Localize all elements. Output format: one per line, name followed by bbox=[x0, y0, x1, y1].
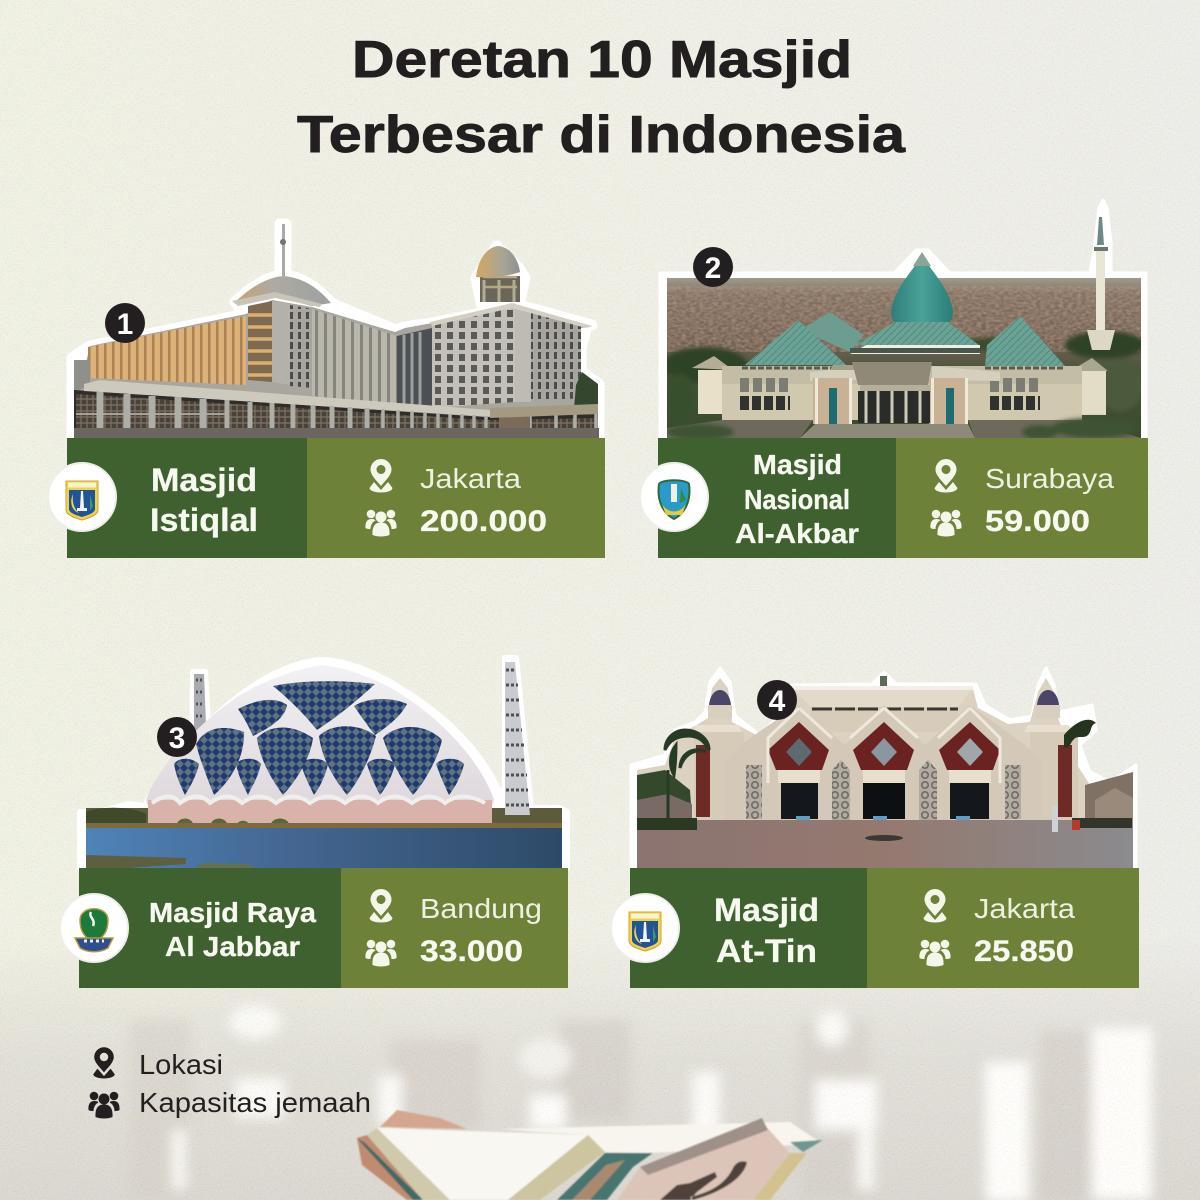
name band bbox=[630, 868, 867, 988]
name text bbox=[735, 449, 859, 549]
panel: Masjid Nasional Al-Akbar bbox=[640, 200, 1148, 558]
name band bbox=[67, 438, 307, 558]
photo: Masjid At-Tin bbox=[631, 668, 1136, 868]
badge: 1: 1 bbox=[117, 308, 133, 341]
name text: Nasional bbox=[744, 484, 850, 515]
emblem: Jakarta bbox=[48, 463, 116, 531]
icon: location bbox=[370, 459, 392, 492]
emblem: East Java bbox=[640, 463, 708, 531]
name text: Masjid bbox=[151, 462, 257, 498]
photo: Masjid Raya Al Jabbar bbox=[80, 658, 567, 868]
name text: Al Jabbar bbox=[165, 931, 300, 962]
name text: Masjid Raya bbox=[149, 897, 316, 928]
info band bbox=[341, 868, 568, 988]
name text bbox=[149, 897, 316, 962]
icon: capacity bbox=[365, 940, 397, 966]
name text: Al-Akbar bbox=[735, 518, 859, 549]
title: Terbesar di Indonesia bbox=[297, 106, 906, 164]
icon: location bbox=[934, 459, 958, 492]
location text: Surabaya bbox=[985, 463, 1114, 494]
icon: location bbox=[370, 889, 392, 922]
capacity number: 33.000 bbox=[420, 935, 523, 968]
icon: capacity legend bbox=[88, 1092, 120, 1118]
location text: Jakarta bbox=[974, 893, 1075, 924]
emblem: Jakarta bbox=[611, 894, 679, 962]
badge: 3: 3 bbox=[169, 722, 185, 755]
legend text: capacity: Kapasitas jemaah bbox=[139, 1087, 371, 1118]
book illustration bbox=[357, 1110, 823, 1200]
legend bbox=[88, 1047, 371, 1118]
photo: Masjid Nasional Al-Akbar bbox=[660, 200, 1146, 440]
icon: capacity bbox=[365, 510, 397, 536]
location text: Bandung bbox=[420, 893, 542, 924]
capacity number: 25.850 bbox=[974, 935, 1074, 968]
name text: Istiqlal bbox=[150, 502, 258, 538]
title: Deretan 10 Masjid bbox=[352, 31, 852, 89]
badge: 1 bbox=[105, 303, 145, 343]
name text bbox=[150, 462, 258, 538]
info band bbox=[896, 438, 1148, 558]
capacity number: 200.000 bbox=[420, 505, 547, 538]
name text: Masjid bbox=[753, 449, 842, 480]
name text: At-Tin bbox=[716, 933, 817, 969]
photo: Masjid Istiqlal bbox=[72, 224, 599, 439]
badge: 4 bbox=[757, 680, 797, 720]
name text: Masjid bbox=[714, 892, 819, 928]
panel: Masjid Istiqlal bbox=[48, 224, 605, 558]
name band bbox=[658, 438, 896, 558]
emblem: West Java bbox=[60, 894, 128, 962]
location text: Jakarta bbox=[420, 463, 521, 494]
title bbox=[297, 31, 906, 164]
icon: capacity bbox=[930, 510, 962, 536]
panel: Masjid Raya Al Jabbar bbox=[60, 658, 568, 988]
badge: 4: 4 bbox=[769, 685, 786, 718]
icon: location bbox=[924, 889, 946, 922]
capacity number: 59.000 bbox=[985, 505, 1090, 538]
panel: Masjid At-Tin bbox=[611, 668, 1139, 988]
badge: 2 bbox=[693, 247, 733, 287]
legend text: location: Lokasi bbox=[139, 1049, 223, 1080]
info band bbox=[867, 868, 1139, 988]
badge: 2: 2 bbox=[705, 252, 721, 285]
name band bbox=[79, 868, 341, 988]
info band bbox=[307, 438, 605, 558]
icon: capacity bbox=[919, 940, 951, 966]
name text bbox=[714, 892, 819, 969]
icon: location legend bbox=[93, 1047, 115, 1078]
badge: 3 bbox=[157, 717, 197, 757]
